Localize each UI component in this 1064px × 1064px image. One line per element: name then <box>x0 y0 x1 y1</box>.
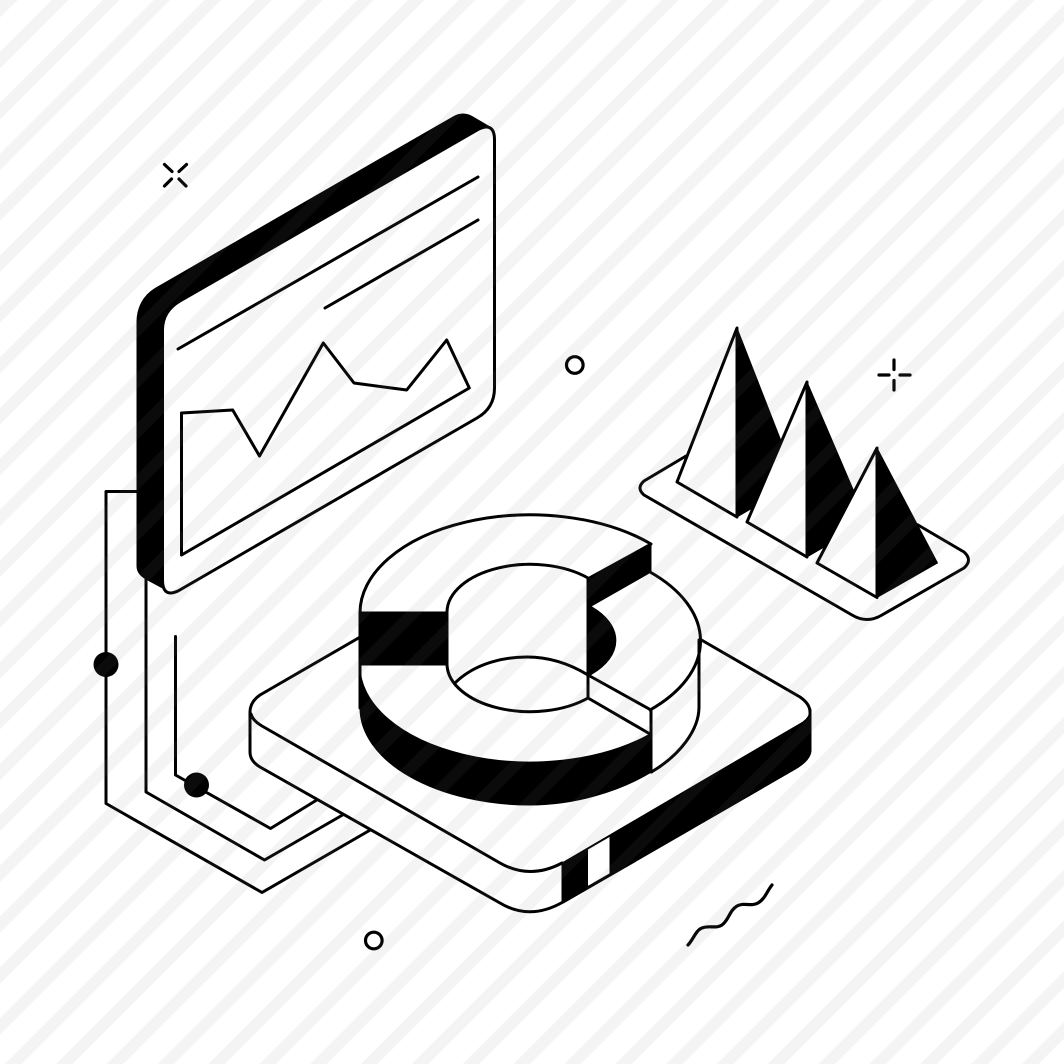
platform white stripe <box>588 837 610 888</box>
inner connector line <box>176 636 320 828</box>
short pyramid <box>817 448 938 598</box>
tall pyramid light face <box>677 328 737 517</box>
inner hole outline <box>447 564 588 712</box>
decorative squiggle <box>688 885 772 945</box>
platform top front edge <box>251 714 562 872</box>
monitor screen <box>162 127 494 593</box>
pyramid chart <box>640 328 968 620</box>
3D donut chart <box>360 515 701 805</box>
right segment cut lines <box>588 675 651 772</box>
pyramid tray <box>640 456 968 620</box>
tall pyramid dark face <box>737 328 797 517</box>
back cut face <box>588 543 651 608</box>
platform body <box>250 636 810 912</box>
outer connector line <box>106 492 372 892</box>
monitor black casing <box>137 114 490 593</box>
left cut face <box>360 612 447 665</box>
heading line long <box>178 177 478 349</box>
tall pyramid <box>677 328 797 517</box>
short pyramid dark face <box>877 448 938 598</box>
node dot on outer line <box>94 652 118 677</box>
inner crescent shadow <box>588 605 616 676</box>
node dot on inner line <box>184 772 209 798</box>
decorative plus sparkle <box>879 360 910 390</box>
platform right bottom outline <box>563 710 810 902</box>
middle pyramid <box>747 382 867 557</box>
area line chart <box>182 340 469 555</box>
small ring upper <box>566 357 583 373</box>
back segment outline <box>360 515 651 708</box>
donut silhouette <box>360 515 699 805</box>
platform dark side <box>562 710 810 902</box>
decorative x sparkle <box>164 164 186 186</box>
middle connector line <box>146 578 346 860</box>
right segment outline <box>650 572 701 772</box>
base platform <box>250 636 810 912</box>
short pyramid light face <box>817 448 877 598</box>
small ring lower <box>366 932 382 949</box>
middle pyramid light face <box>747 382 807 557</box>
monitor with line chart <box>137 114 494 593</box>
front outer dark wall <box>360 665 652 805</box>
heading line short <box>325 220 478 308</box>
middle pyramid dark face <box>807 382 867 557</box>
circuit connector lines <box>94 492 372 892</box>
